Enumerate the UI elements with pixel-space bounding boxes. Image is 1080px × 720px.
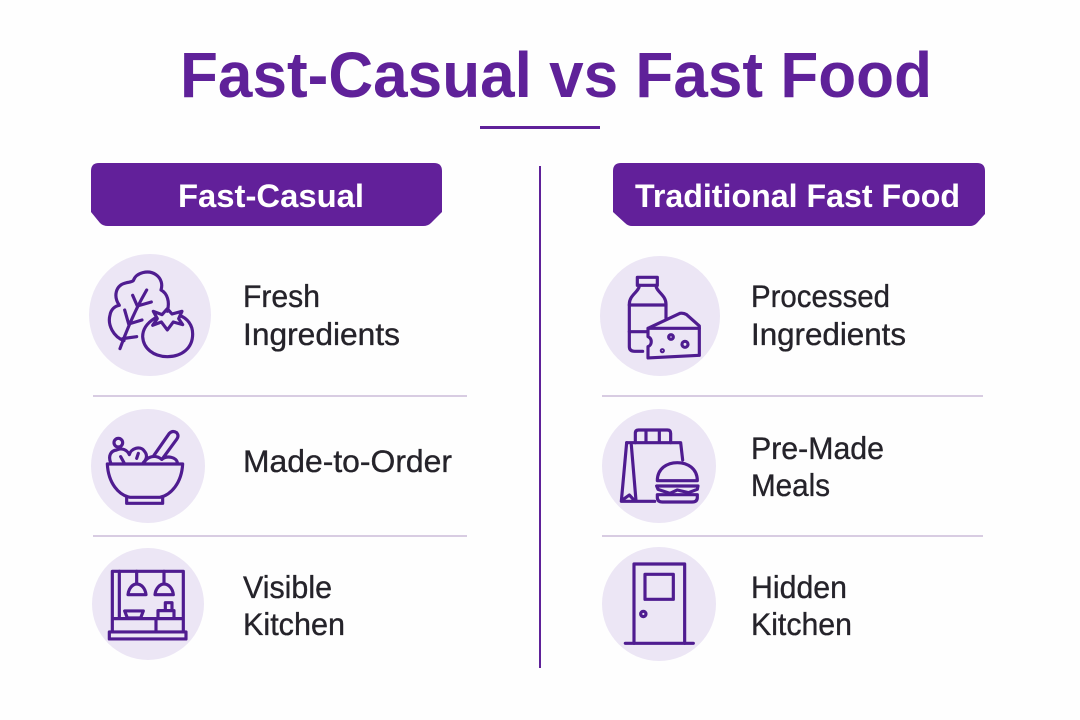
heading: Fast-Casual: Fast-Casual [178,178,364,214]
heading: Fast-Casual [91,163,442,226]
center divider [539,166,541,668]
item: visible kitchen [92,548,345,660]
divider [93,535,467,537]
icon: salad bowl [91,409,205,523]
panel: fast-casual [89,163,467,660]
label: Made-to-Order [243,443,452,479]
item: hidden kitchen [602,547,852,661]
label: Meals [751,467,830,503]
label: Fresh [243,278,320,314]
icon: open kitchen [92,548,204,660]
heading: Traditional Fast Food [613,163,985,226]
icon: leaf and tomato [89,254,211,376]
icon: closed door [602,547,716,661]
label: Hidden [751,569,847,605]
label: Ingredients [243,316,400,352]
divider [602,535,983,537]
label: Visible [243,569,332,605]
divider [602,395,983,397]
label: Processed [751,278,890,314]
icon: bag and burger [602,409,716,523]
divider [93,395,467,397]
icon: bottle and cheese [600,256,720,376]
item: fresh ingredients [89,254,400,376]
label: Kitchen [751,606,852,642]
label: Pre-Made [751,430,884,466]
item: made-to-order [91,409,452,523]
title: Fast-Casual vs Fast Food [180,39,932,111]
panel: traditional fast food [600,163,985,661]
item: processed ingredients [600,256,906,376]
heading: Traditional Fast Food: Traditional Fast Food [635,178,960,214]
label: Ingredients [751,316,906,352]
item: pre-made meals [602,409,884,523]
title underline [480,126,600,129]
label: Kitchen [243,606,345,642]
